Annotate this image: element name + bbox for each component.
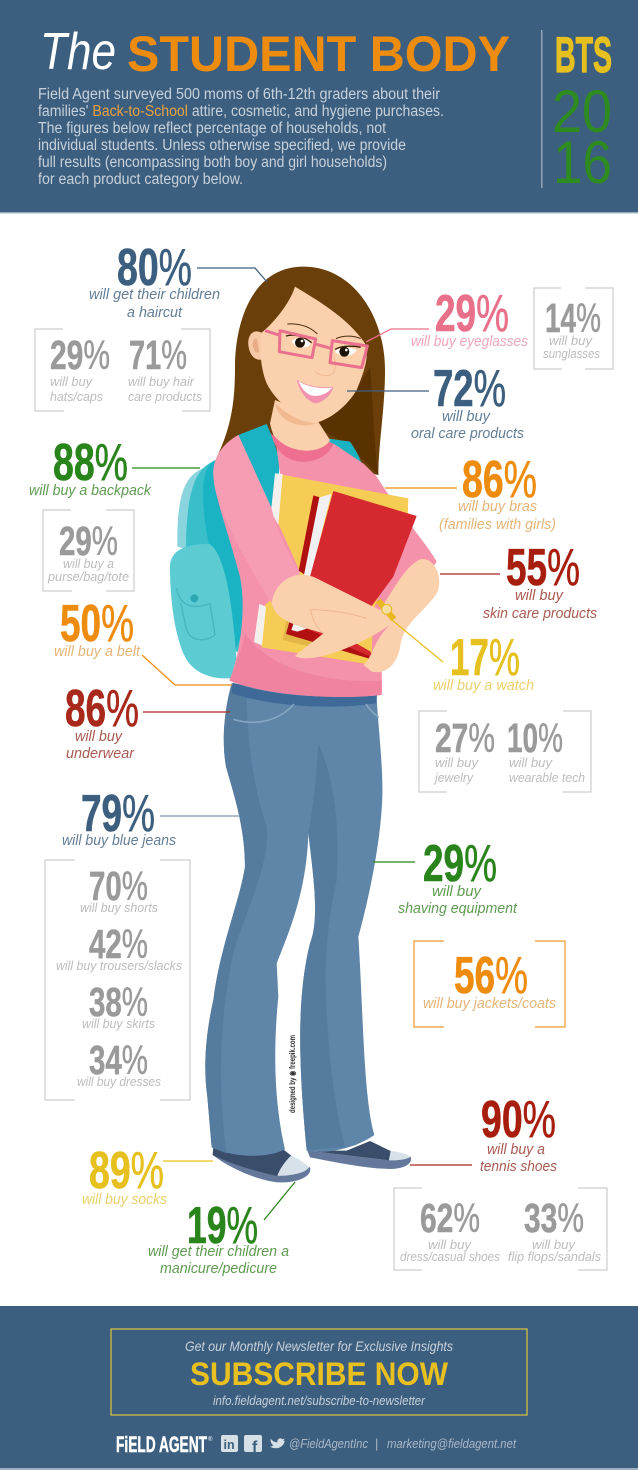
- icon: linkedin: in: [224, 1438, 235, 1452]
- box: purse: will buy a: [63, 556, 114, 571]
- stat: haircut: a haircut: [127, 305, 183, 321]
- box: casual shoes and flip flops: 62%: [420, 1195, 480, 1241]
- box: jewelry and wearable tech: wearable tech: [509, 770, 585, 785]
- subscribe box: SUBSCRIBE NOW: [190, 1356, 449, 1392]
- shirt: [213, 435, 437, 697]
- box: hats and hair care: will buy: [50, 374, 93, 389]
- box: shorts, trousers, skirts, dresses: will buy dresses: [77, 1074, 161, 1089]
- stat: backpack: [29, 434, 200, 499]
- stat: oral care: oral care products: [411, 426, 524, 442]
- box: jewelry and wearable tech: will buy: [509, 755, 554, 770]
- BTS 2016 badge: [552, 27, 612, 196]
- icon: facebook: f: [252, 1439, 258, 1456]
- box: casual shoes and flip flops: will buy: [428, 1237, 473, 1252]
- box: purse: 29%: [59, 518, 118, 564]
- intro text: Field Agent surveyed 500 moms of 6th-12th graders about their: [38, 86, 440, 103]
- box: shorts, trousers, skirts, dresses: will buy skirts: [82, 1016, 155, 1031]
- box: jackets and coats: [414, 941, 565, 1027]
- box: jewelry and wearable tech: jewelry: [433, 770, 474, 785]
- stat: eyeglasses: [366, 285, 528, 350]
- stat: oral care: [347, 360, 524, 442]
- icon: linkedin: [221, 1435, 238, 1452]
- glasses: [265, 331, 367, 368]
- logo: Field Agent: ®: [208, 1436, 213, 1443]
- box: jewelry and wearable tech: 27%: [435, 715, 495, 761]
- stat: blue jeans: [62, 785, 240, 849]
- box: sunglasses: [534, 288, 613, 369]
- subscribe box: Get our Monthly Newsletter for Exclusive Insights: [185, 1338, 453, 1354]
- title: STUDENT BODY: [127, 26, 510, 82]
- box: jackets and coats: 56%: [454, 947, 528, 1005]
- box: sunglasses: 14%: [545, 295, 601, 341]
- box: shorts, trousers, skirts, dresses: will buy shorts: [80, 900, 158, 915]
- box: shorts, trousers, skirts, dresses: 42%: [89, 921, 148, 967]
- jeans and shoes: [205, 683, 411, 1182]
- box: purse: purse/bag/tote: [47, 569, 129, 584]
- upper body: [170, 267, 439, 697]
- stat: eyeglasses: will buy eyeglasses: [411, 334, 528, 350]
- box: casual shoes and flip flops: dress/casual shoes: [400, 1249, 500, 1264]
- box: jackets and coats: will buy jackets/coats: [423, 996, 556, 1012]
- box: shorts, trousers, skirts, dresses: 70%: [89, 863, 148, 909]
- books: [254, 473, 417, 665]
- box: shorts, trousers, skirts, dresses: [45, 860, 190, 1100]
- stat: belt: [54, 595, 232, 685]
- stat: underwear: [65, 680, 230, 762]
- box: jewelry and wearable tech: [419, 711, 591, 792]
- box: jewelry and wearable tech: 10%: [507, 715, 563, 761]
- hair: [217, 267, 385, 475]
- box: casual shoes and flip flops: 33%: [524, 1195, 584, 1241]
- box: casual shoes and flip flops: will buy: [532, 1237, 577, 1252]
- stat: belt: 50%: [60, 595, 134, 653]
- stat: watch: will buy a watch: [433, 678, 534, 694]
- contact line: [289, 1436, 517, 1451]
- credit: freepik: designed by ◉ freepik.com: [288, 1035, 297, 1113]
- stat: backpack: will buy a backpack: [29, 483, 152, 499]
- face: [248, 287, 367, 423]
- stat: bras: will buy bras: [458, 499, 537, 515]
- box: shorts, trousers, skirts, dresses: 34%: [89, 1037, 148, 1083]
- box: sunglasses: will buy: [549, 333, 594, 348]
- box: shorts, trousers, skirts, dresses: 38%: [89, 979, 148, 1025]
- intro text: for each product category below.: [38, 171, 243, 188]
- stat: underwear: underwear: [66, 746, 135, 762]
- box: sunglasses: sunglasses: [543, 346, 600, 361]
- stat: haircut: will get their children: [89, 287, 220, 303]
- intro text: families' Back-to-School attire, cosmetic, and hygiene purchases.: [38, 103, 444, 120]
- watch: [378, 601, 394, 619]
- box: casual shoes and flip flops: flip flops/sandals: [508, 1249, 601, 1264]
- BTS 2016 badge: 20: [552, 78, 612, 145]
- box: hats and hair care: 71%: [129, 332, 187, 378]
- icon: facebook: [244, 1435, 262, 1456]
- backpack straps: [238, 424, 279, 508]
- stat: manicure: [148, 1182, 295, 1277]
- stat: tennis shoes: tennis shoes: [480, 1159, 557, 1175]
- icon: twitter: [270, 1438, 285, 1448]
- stat: tennis shoes: will buy a: [487, 1142, 545, 1158]
- stat: blue jeans: 79%: [81, 785, 155, 843]
- stat: skin care: [440, 539, 597, 622]
- stat: oral care: 72%: [433, 360, 506, 418]
- intro text: individual students. Unless otherwise specified, we provide: [38, 137, 406, 154]
- stat: bras: 86%: [462, 451, 537, 509]
- stat: haircut: 80%: [117, 239, 192, 297]
- neck: [270, 400, 330, 457]
- logo: Field Agent: [116, 1432, 213, 1457]
- contact line: marketing@fieldagent.net: [387, 1436, 517, 1451]
- stat: shaving: [373, 835, 518, 917]
- arms: [213, 435, 439, 672]
- stat: watch: 17%: [450, 629, 520, 687]
- box: hats and hair care: 29%: [50, 332, 110, 378]
- BTS 2016 badge: 16: [553, 129, 612, 196]
- title: The: [40, 23, 116, 81]
- contact line: |: [375, 1436, 378, 1451]
- stat: blue jeans: will buy blue jeans: [62, 833, 176, 849]
- stat: skin care: will buy: [515, 588, 564, 604]
- stat: shaving: shaving equipment: [398, 901, 518, 917]
- footer panel: [0, 1306, 638, 1470]
- stat: socks: will buy socks: [82, 1192, 167, 1208]
- subscribe box: [111, 1329, 527, 1415]
- subscribe box: info.fieldagent.net/subscribe-to-newsletter: [213, 1393, 426, 1408]
- logo: Field Agent: FiELD AGENT: [116, 1432, 207, 1457]
- stat: manicure: 19%: [187, 1197, 258, 1255]
- stat: bras: (families with girls): [439, 517, 556, 533]
- backpack: [177, 467, 205, 550]
- box: hats and hair care: [35, 329, 210, 411]
- box: purse: [43, 510, 134, 591]
- stat: tennis shoes: [410, 1091, 557, 1175]
- stat: socks: 89%: [89, 1142, 164, 1200]
- box: hats and hair care: hats/caps: [50, 389, 103, 404]
- stat: manicure: manicure/pedicure: [160, 1261, 277, 1277]
- intro text: full results (encompassing both boy and girl households): [38, 154, 387, 171]
- stat: manicure: will get their children a: [148, 1244, 289, 1260]
- stat: backpack: 88%: [53, 434, 128, 492]
- stat: underwear: will buy: [75, 729, 123, 745]
- stat: belt: will buy a belt: [54, 644, 141, 660]
- stat: haircut: [89, 239, 267, 321]
- intro text: [38, 86, 444, 188]
- stat: shaving: 29%: [423, 835, 497, 893]
- intro text: The figures below reflect percentage of households, not: [38, 120, 387, 137]
- box: casual shoes and flip flops: [394, 1188, 607, 1270]
- stat: tennis shoes: 90%: [481, 1091, 556, 1149]
- contact line: @FieldAgentInc: [289, 1436, 368, 1451]
- box: shorts, trousers, skirts, dresses: will buy trousers/slacks: [56, 958, 182, 973]
- stat: watch: [392, 620, 534, 694]
- eyes: [286, 335, 361, 357]
- illustration: student figure: [170, 267, 439, 1182]
- stat: eyeglasses: 29%: [435, 285, 509, 343]
- box: hats and hair care: will buy hair: [128, 374, 195, 389]
- stat: skin care: 55%: [506, 539, 580, 597]
- header panel: [0, 0, 638, 214]
- stat: shaving: will buy: [432, 884, 482, 900]
- stat: bras: [385, 451, 556, 533]
- stat: skin care: skin care products: [483, 606, 597, 622]
- mouth: [297, 380, 333, 403]
- stat: oral care: will buy: [442, 409, 491, 425]
- box: jewelry and wearable tech: will buy: [435, 755, 480, 770]
- stat: underwear: 86%: [65, 680, 139, 738]
- stat: socks: [82, 1142, 213, 1208]
- box: hats and hair care: care products: [128, 389, 202, 404]
